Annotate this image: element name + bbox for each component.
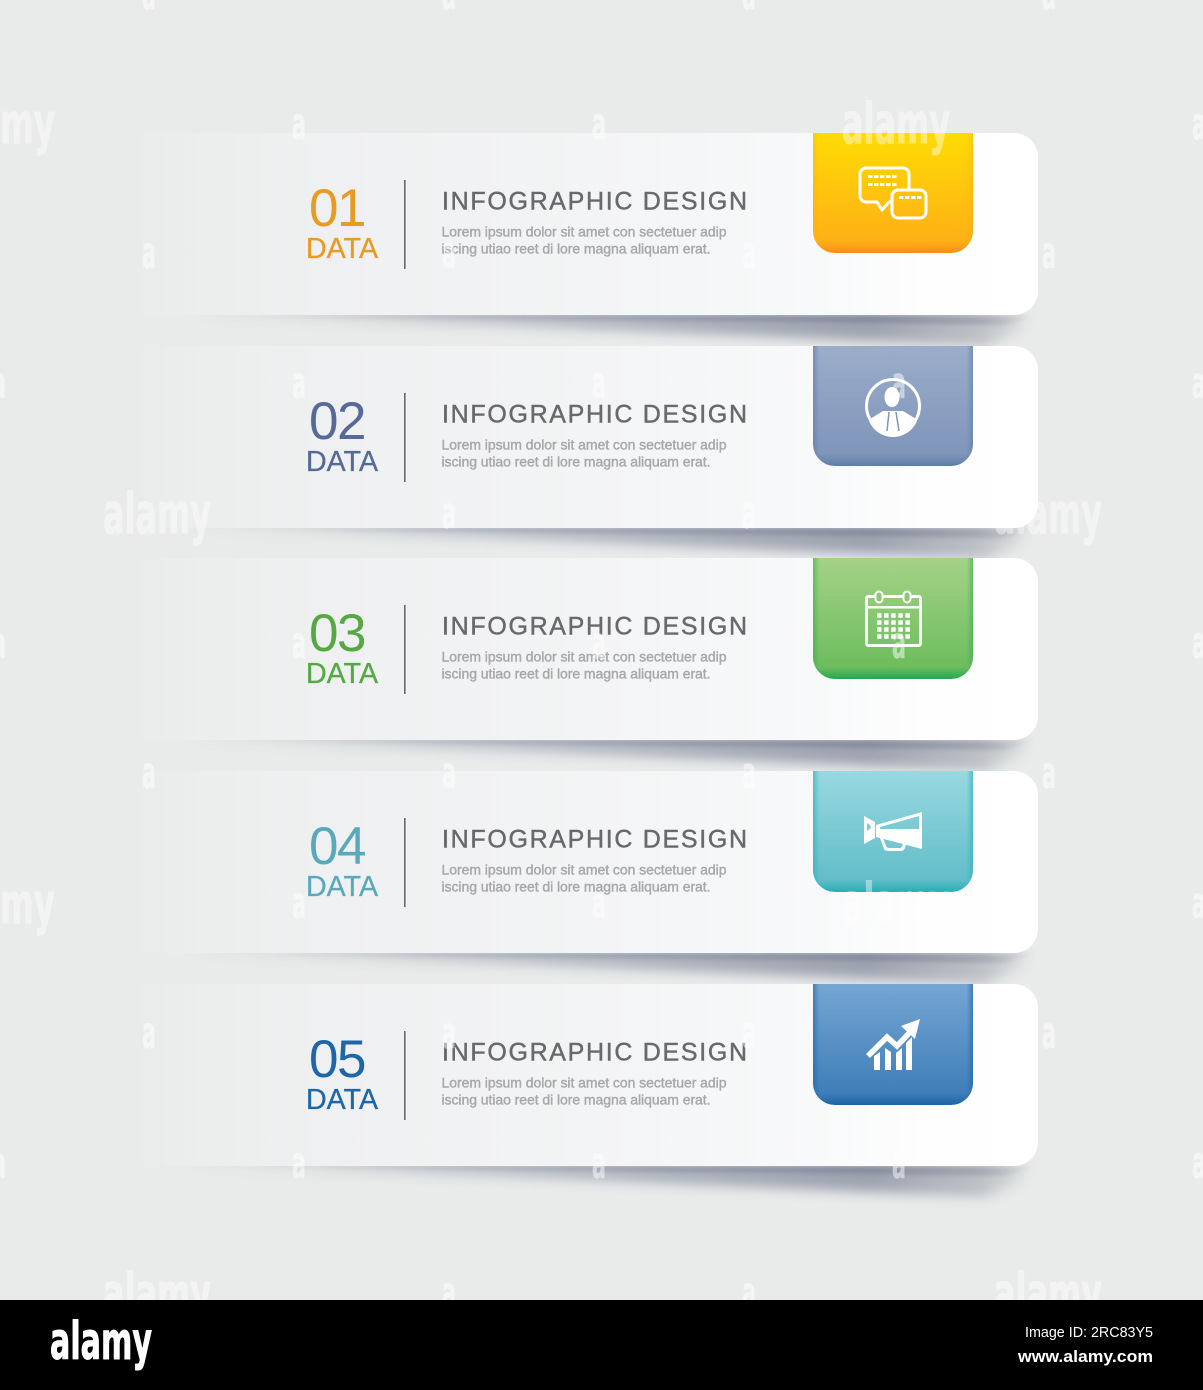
footer bar	[0, 1300, 1203, 1390]
divider 01	[404, 180, 406, 269]
label DATA 02: DATA	[306, 446, 379, 478]
card 03	[143, 558, 1038, 740]
card 05	[143, 984, 1038, 1166]
body text 03	[442, 648, 727, 682]
tab 03	[813, 558, 973, 679]
body text 01: Lorem ipsum dolor sit amet con sectetuer adip	[442, 224, 727, 240]
body text 02: iscing utiao reet di lore magna aliquam erat.	[442, 454, 710, 470]
label DATA 03: DATA	[306, 658, 379, 690]
watermark: a	[1042, 1008, 1056, 1059]
watermark: a	[742, 748, 756, 799]
tab 01	[813, 133, 973, 253]
watermark: alamy	[842, 872, 950, 937]
watermark: a	[592, 618, 606, 669]
divider 03	[404, 605, 406, 694]
watermark: a	[442, 1268, 456, 1319]
watermark: a	[292, 99, 306, 150]
watermark: a	[142, 1008, 156, 1059]
watermark: a	[292, 618, 306, 669]
watermark: a	[892, 618, 906, 669]
watermark: a	[142, 228, 156, 279]
panel: row 02	[143, 346, 1038, 559]
watermark: a	[1042, 228, 1056, 279]
icon: chat bubbles	[860, 168, 926, 218]
panel: row 01	[143, 133, 1038, 346]
panel: row 04	[143, 771, 1038, 984]
divider 04	[404, 818, 406, 907]
card 01	[143, 133, 1038, 315]
label DATA 04: DATA	[306, 871, 379, 903]
card shadow 01	[180, 315, 1035, 346]
panel: row 03	[143, 558, 1038, 771]
tab 04	[813, 771, 973, 892]
body text 02	[442, 436, 727, 470]
watermark: a	[592, 99, 606, 150]
heading 01: INFOGRAPHIC DESIGN	[442, 188, 747, 216]
watermark: a	[592, 358, 606, 409]
number 01: 01	[309, 179, 365, 238]
watermark: a	[292, 878, 306, 929]
body text 05: iscing utiao reet di lore magna aliquam erat.	[442, 1092, 710, 1108]
divider 05	[404, 1031, 406, 1120]
watermark: a	[442, 488, 456, 539]
heading 03: INFOGRAPHIC DESIGN	[442, 612, 747, 640]
number 02: 02	[309, 392, 365, 451]
watermark: a	[892, 1138, 906, 1189]
number 04: 04	[309, 817, 365, 876]
watermark: a	[742, 228, 756, 279]
watermark: alamy	[994, 482, 1102, 547]
watermark: alamy	[842, 92, 950, 157]
watermark: my	[0, 872, 55, 937]
body text 04: iscing utiao reet di lore magna aliquam erat.	[442, 878, 710, 894]
watermark: alamy	[994, 1262, 1102, 1327]
card shadow 02	[180, 528, 1035, 559]
image ID: Image ID: 2RC83Y5	[1025, 1324, 1153, 1341]
body text 03: iscing utiao reet di lore magna aliquam erat.	[442, 666, 710, 682]
website: www.alamy.com	[1017, 1347, 1153, 1366]
heading 05: INFOGRAPHIC DESIGN	[442, 1038, 747, 1066]
watermark: alamy	[103, 482, 211, 547]
card 04	[143, 771, 1038, 953]
divider 02	[404, 393, 406, 482]
watermark: a	[142, 748, 156, 799]
watermark: a	[742, 488, 756, 539]
label DATA 01: DATA	[306, 233, 379, 265]
watermark: my	[0, 92, 55, 157]
card shadow 03	[180, 740, 1035, 771]
body text 05	[442, 1074, 727, 1108]
panel: row 05	[143, 984, 1038, 1197]
watermark: a	[742, 1268, 756, 1319]
body text 03: Lorem ipsum dolor sit amet con sectetuer adip	[442, 648, 727, 664]
body text 02: Lorem ipsum dolor sit amet con sectetuer adip	[442, 436, 727, 452]
watermark: a	[742, 1008, 756, 1059]
watermark: a	[292, 1138, 306, 1189]
icon: growth chart	[868, 1019, 920, 1070]
tab 05	[813, 984, 973, 1105]
footer logo: alamy	[50, 1312, 152, 1372]
card shadow 05	[180, 1166, 1035, 1197]
watermark: a	[592, 1138, 606, 1189]
watermark: a	[892, 358, 906, 409]
number 05: 05	[309, 1030, 365, 1089]
heading 04: INFOGRAPHIC DESIGN	[442, 826, 747, 854]
tab 02	[813, 346, 973, 466]
watermark: a	[442, 228, 456, 279]
body text 01	[442, 224, 727, 256]
watermark: a	[592, 878, 606, 929]
watermark: a	[292, 358, 306, 409]
watermark: a	[1042, 748, 1056, 799]
body text 05: Lorem ipsum dolor sit amet con sectetuer adip	[442, 1074, 727, 1090]
icon: megaphone	[864, 812, 922, 851]
card 02	[143, 346, 1038, 528]
watermark: alamy	[103, 1262, 211, 1327]
body text 04: Lorem ipsum dolor sit amet con sectetuer adip	[442, 862, 727, 878]
body text 04	[442, 862, 727, 894]
watermark: a	[442, 1008, 456, 1059]
number 03: 03	[309, 604, 365, 663]
icon: businessman portrait	[866, 380, 920, 437]
card shadow 04	[180, 953, 1035, 984]
heading 02: INFOGRAPHIC DESIGN	[442, 400, 747, 428]
body text 01: iscing utiao reet di lore magna aliquam erat.	[442, 240, 710, 256]
icon: calendar	[866, 592, 921, 646]
label DATA 05: DATA	[306, 1084, 379, 1116]
watermark: a	[442, 748, 456, 799]
